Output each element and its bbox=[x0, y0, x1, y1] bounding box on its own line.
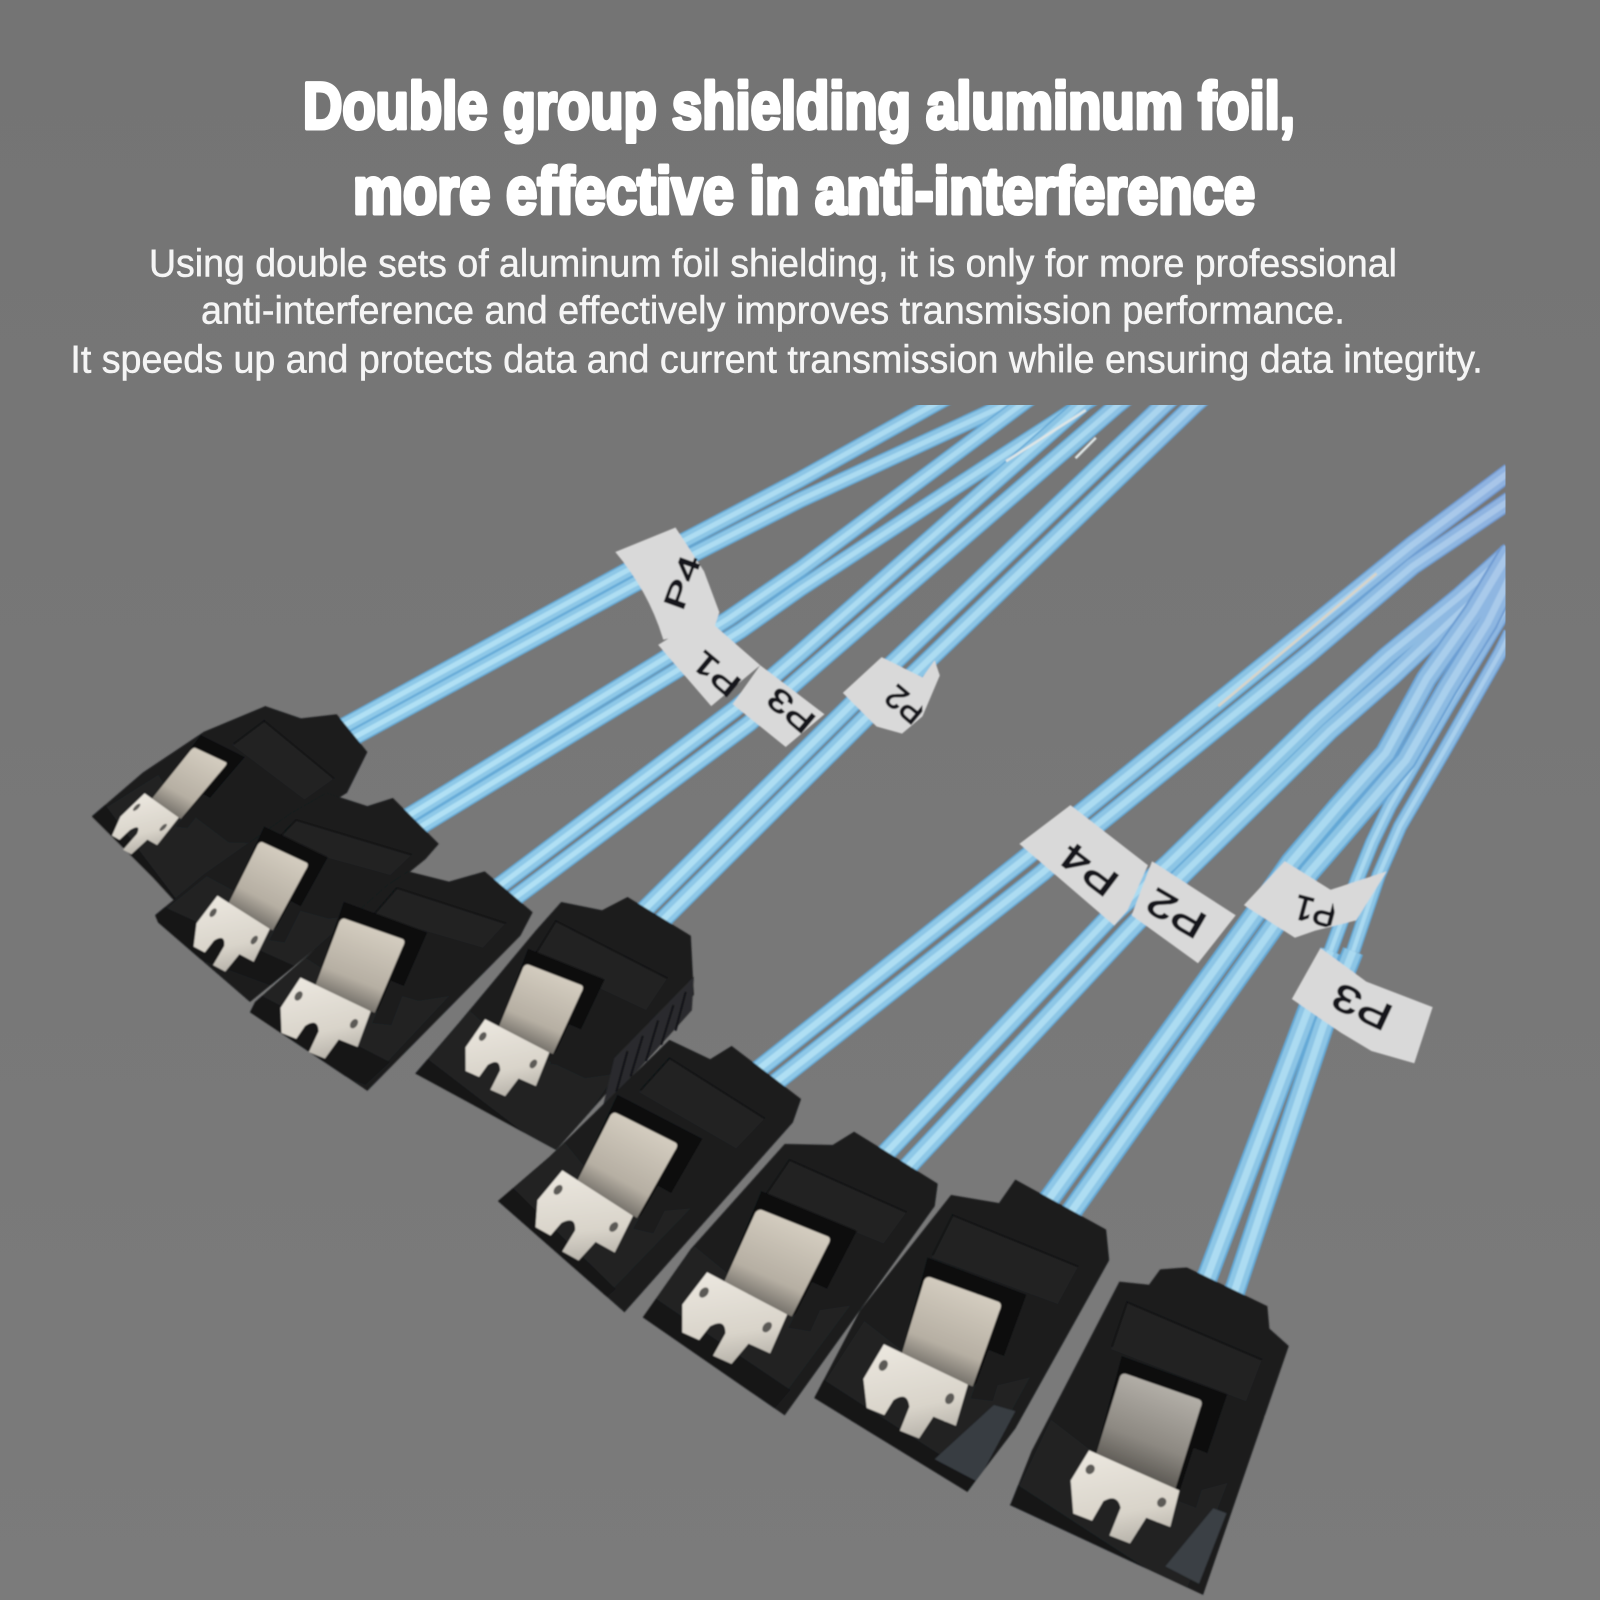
title: more effective in anti-interference bbox=[353, 154, 1255, 228]
connector 5 bbox=[498, 1039, 802, 1313]
description text: It speeds up and protects data and current transmission while ensuring data integrity. bbox=[70, 338, 1483, 381]
title bbox=[303, 70, 1295, 228]
foil highlights between cable strands bbox=[1006, 410, 1377, 706]
label: top P3: P3 bbox=[760, 680, 822, 741]
connector 3 bbox=[249, 870, 534, 1092]
label: top P1 bbox=[658, 616, 760, 706]
cable labels bbox=[615, 528, 1433, 1063]
label: lower P2 bbox=[1132, 861, 1236, 963]
label: top P4 bbox=[615, 528, 719, 640]
label: top P2 bbox=[843, 657, 940, 734]
connector 4 ridged grip bbox=[602, 977, 694, 1110]
title: Double group shielding aluminum foil, bbox=[303, 70, 1295, 144]
connector 2 bbox=[154, 796, 440, 1002]
label: lower P1: P1 bbox=[1290, 887, 1341, 934]
label: lower P3 bbox=[1292, 948, 1433, 1063]
connector 7 bbox=[814, 1179, 1110, 1492]
cable: lower group P2 bbox=[886, 551, 1510, 1167]
cable: top group P3 bbox=[494, 396, 1129, 902]
label: top P2: P2 bbox=[878, 678, 932, 732]
cable: top group P1 bbox=[404, 396, 1096, 831]
label: lower P4 bbox=[1019, 805, 1148, 926]
connector 1 bbox=[91, 705, 368, 900]
description text: anti-interference and effectively improves transmission performance. bbox=[201, 289, 1345, 332]
description text bbox=[70, 243, 1483, 381]
black SATA connectors bbox=[39, 694, 1296, 1600]
cable: top group P2 bbox=[641, 396, 1204, 924]
product photo: SATA breakout cables bbox=[39, 391, 1510, 1600]
label: lower P1 bbox=[1244, 861, 1387, 938]
label: top P4: P4 bbox=[658, 551, 708, 614]
label: lower P4: P4 bbox=[1052, 834, 1126, 905]
connector 4 bbox=[414, 896, 695, 1150]
description text: Using double sets of aluminum foil shielding, it is only for more professional bbox=[149, 243, 1397, 286]
connector 6 bbox=[642, 1131, 938, 1416]
label: lower P2: P2 bbox=[1139, 880, 1213, 947]
label: top P1: P1 bbox=[685, 644, 748, 704]
cable: top group P4 bbox=[335, 391, 1020, 741]
cable: lower group P3, connector run bbox=[1202, 951, 1353, 1303]
label: lower P3: P3 bbox=[1325, 975, 1398, 1039]
blue cable pairs bbox=[335, 391, 1510, 1303]
cable: lower group P1 bbox=[1047, 551, 1510, 1214]
cable: lower group P3, upper run bbox=[1331, 602, 1510, 951]
connector 8 bbox=[1009, 1266, 1290, 1596]
cable: lower group P4 bbox=[753, 471, 1510, 1086]
label: top P3 bbox=[733, 665, 824, 747]
